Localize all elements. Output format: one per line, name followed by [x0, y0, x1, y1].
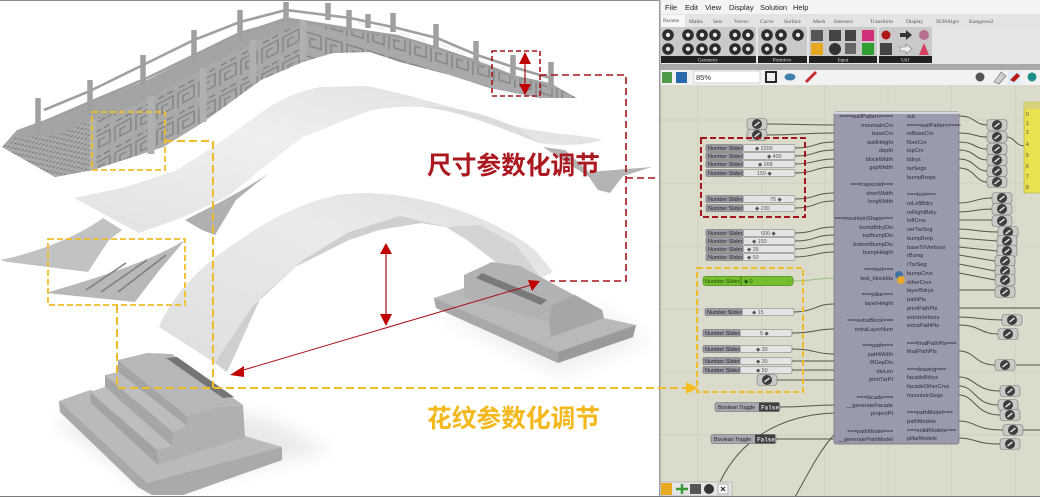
number sliders: Number Slider [707, 310, 742, 316]
ribbon: Geometry [698, 58, 718, 64]
output labels: facadeOtherCrvs [907, 384, 949, 390]
output labels: bdrys [907, 157, 921, 163]
input labels [834, 114, 893, 443]
ground shadows [55, 310, 650, 490]
arrow: to size sliders [626, 172, 702, 184]
yellow box: railing detail [92, 112, 165, 170]
input labels: bumpHeight [863, 250, 893, 256]
input labels: ===pathModel=== [847, 429, 893, 435]
arrow: span length [230, 280, 540, 377]
input labels: pathWidth [868, 352, 893, 358]
input labels: ===test=== [864, 267, 893, 273]
number sliders: ◆ 2200 [755, 146, 773, 152]
tabs: Display [906, 19, 923, 25]
output labels: otherCrvs [907, 280, 931, 286]
number sliders: ◆ 15 [752, 310, 764, 316]
tabs: Params [663, 18, 679, 24]
number sliders: ◆ 400 [767, 154, 782, 160]
tabs: Vector [734, 19, 749, 25]
main python component [834, 112, 961, 444]
ribbon: Input [838, 58, 849, 64]
lower arch layer [159, 193, 553, 372]
number sliders: 75 ◆ [770, 197, 782, 203]
menu bar: Edit [685, 3, 699, 12]
output labels: ===test=== [907, 192, 936, 198]
input labels: ===pillar=== [862, 292, 893, 298]
output labels: extraVertices [907, 315, 940, 321]
tabs: Surface [784, 18, 801, 25]
input labels: longWidth [868, 199, 893, 205]
input labels: ====wallPattern==== [839, 114, 893, 120]
yellow panel: 8 [1026, 185, 1029, 191]
number sliders: ◆ 30 [756, 347, 768, 353]
input labels: layerHeight [865, 301, 893, 307]
tabs: Curve [760, 19, 774, 25]
right leg wing [543, 147, 652, 193]
tabs: Maths [689, 19, 703, 25]
number sliders: Number Slider [705, 359, 740, 365]
input labels: bottomBumpDis [853, 242, 893, 248]
menu bar: Help [793, 3, 808, 12]
panel: exploded bridge model [0, 2, 652, 495]
output labels: pillarModels [907, 436, 937, 442]
output labels: rBump [907, 253, 923, 259]
number sliders: Number Slider [708, 171, 743, 177]
boolean toggles [711, 402, 780, 444]
left abutment [59, 353, 282, 495]
number sliders: Number Slider [708, 154, 743, 160]
output labels: bumpCrvs [907, 271, 933, 277]
input labels: bumpBdryDis [859, 225, 893, 231]
number sliders: Number Slider [708, 206, 743, 212]
number sliders: Number Slider [705, 368, 740, 374]
arrow: railing height [519, 52, 531, 95]
number sliders: 5 ◆ [760, 331, 769, 337]
boolean toggles: False [761, 404, 779, 412]
tabs: SUHAlgrc [936, 19, 960, 25]
input labels: extraLayerNum [855, 327, 893, 333]
number sliders: Number Slider [708, 239, 743, 245]
heading: pattern parameters: 花纹参数化调节 [427, 404, 600, 433]
number sliders: Number Slider [705, 331, 740, 337]
number sliders: Number Slider [708, 255, 743, 261]
output labels: reLeftBdry [907, 201, 933, 207]
input labels: baseCrv [872, 131, 893, 137]
output labels [907, 114, 961, 442]
output labels: bumpBrep [907, 236, 933, 242]
wires [720, 116, 1040, 497]
left leg strips [0, 173, 269, 302]
input labels: lftGapDis [870, 360, 893, 366]
red dashed box on railing [492, 51, 540, 96]
input labels: blockWidth [866, 157, 893, 163]
input labels: ===facade=== [857, 395, 893, 401]
number sliders [703, 144, 795, 374]
boolean toggles: Boolean Toggle [714, 437, 751, 443]
output labels: ====wallPattern==== [907, 123, 961, 129]
right abutment [434, 262, 636, 363]
heading: size parameters: 尺寸参数化调节 [427, 151, 600, 180]
output labels: printPathPts [907, 306, 938, 312]
output labels: finalPathPts [907, 349, 937, 355]
yellow panel [1024, 102, 1040, 193]
input labels: mountainCrv [861, 123, 893, 129]
arrow: arch height [380, 243, 392, 326]
output labels: bumpBreps [907, 175, 936, 181]
number sliders: Number Slider [708, 231, 743, 237]
green slider: Number Slider [705, 279, 740, 285]
input labels: gapWidth [869, 165, 893, 171]
output labels: rTarSeg [907, 262, 927, 268]
input labels: test_blockIds [860, 276, 893, 282]
tabs: Mesh [813, 19, 825, 25]
yellow panel: 1 [1026, 121, 1029, 127]
arrow: to pattern sliders [686, 382, 698, 394]
number sliders: Number Slider [708, 162, 743, 168]
output labels: ===drawing=== [907, 367, 946, 373]
green slider: ◆ 0 [744, 279, 753, 285]
icon: python script [895, 271, 905, 284]
output labels: pathPts [907, 297, 926, 303]
menu bar: Solution [760, 3, 787, 12]
red leader line [540, 75, 626, 281]
input labels: projectPt [871, 411, 893, 417]
boolean toggles: False [757, 436, 775, 444]
input labels: ===mountainShape=== [834, 216, 893, 222]
output labels: out [907, 114, 915, 120]
white arch layer [74, 86, 602, 233]
number sliders: ◆ 150 [752, 239, 767, 245]
output labels: floorCrv [907, 140, 927, 146]
ribbon: Util [901, 58, 909, 64]
number sliders: ◆ 30 [756, 359, 768, 365]
red dashed box on sliders [701, 138, 805, 217]
menu bar: View [705, 3, 722, 12]
number sliders: ◆ 50 [756, 368, 768, 374]
input labels: divLen [877, 369, 893, 375]
output labels: tarSegs [907, 166, 926, 172]
yellow panel: 4 [1026, 142, 1029, 148]
output labels: extraPathPts [907, 323, 939, 329]
yellow panel: 2 [1026, 130, 1029, 136]
tabs: Kangaroo2 [969, 19, 994, 25]
panel: Grasshopper window [659, 0, 1040, 497]
tabs: Sets [713, 19, 722, 25]
yellow panel: 5 [1026, 153, 1029, 159]
output labels: ===finalPathPts=== [907, 341, 956, 347]
output labels: loftCrvs [907, 218, 926, 224]
input labels: ===path=== [862, 343, 893, 349]
number sliders: ◆ 268 [758, 162, 773, 168]
output labels: reRightBdry [907, 210, 937, 216]
ribbon: Primitive [773, 58, 792, 64]
number sliders: Number Slider [705, 347, 740, 353]
yellow panel: 0 [1026, 112, 1029, 118]
input labels: shortWidth [866, 191, 893, 197]
output labels: reBaseCrv [907, 131, 934, 137]
parameter nodes [747, 118, 1023, 450]
yellow leader lines [117, 141, 690, 388]
yellow box: sliders [697, 268, 803, 392]
bottom-left toolbar [660, 482, 732, 496]
number sliders: Number Slider [708, 197, 743, 203]
ribbon [660, 27, 1040, 64]
input labels: __generateFacade [845, 403, 893, 409]
canvas [660, 85, 1040, 496]
input labels: ===extraBlock=== [847, 318, 893, 324]
output labels: layerBdrys [907, 288, 934, 294]
green slider [703, 276, 793, 286]
number sliders: Number Slider [708, 247, 743, 253]
menu bar [660, 0, 1040, 14]
output labels: baseTriVertices [907, 245, 946, 251]
boolean toggles: Boolean Toggle [718, 405, 755, 411]
bridge deck with railing [2, 2, 577, 177]
input labels: depth [879, 148, 893, 154]
input labels: topBumpDis [863, 233, 893, 239]
output labels: pathModels [907, 419, 936, 425]
yellow panel: 7 [1026, 174, 1029, 180]
output labels: ===pathModel=== [907, 410, 953, 416]
yellow pattern annotations [48, 112, 803, 394]
yellow box: wing detail [48, 239, 185, 305]
red dimension annotations [230, 51, 702, 377]
yellow panel: 6 [1026, 164, 1029, 170]
input labels: wallHeight [866, 140, 893, 146]
output labels: topCrv [907, 148, 924, 154]
number sliders: 150 ◆ [757, 171, 772, 177]
input labels: printTarPt [869, 377, 893, 383]
menu bar: Display [729, 3, 754, 12]
output labels: facadeBdrys [907, 375, 938, 381]
number sliders: ◆ 230 [755, 206, 770, 212]
canvas toolbar [660, 64, 1040, 85]
tabs: Transform [870, 18, 894, 25]
number sliders: 600 ◆ [761, 231, 776, 237]
number sliders: Number Slider [708, 146, 743, 152]
canvas toolbar: 85% [696, 73, 711, 82]
number sliders: ◆ 35 [747, 247, 759, 253]
menu bar: File [665, 3, 677, 12]
tabs [660, 14, 1040, 27]
output labels: verTarSeg [907, 227, 932, 233]
output labels: ===solidModels=== [907, 428, 956, 434]
number sliders: ◆ 50 [747, 255, 759, 261]
tabs: Intersect [834, 19, 853, 25]
input labels: __generatePathModel [837, 437, 893, 443]
output labels: mountainSegs [907, 393, 943, 399]
input labels: ===trapezoid=== [850, 182, 893, 188]
